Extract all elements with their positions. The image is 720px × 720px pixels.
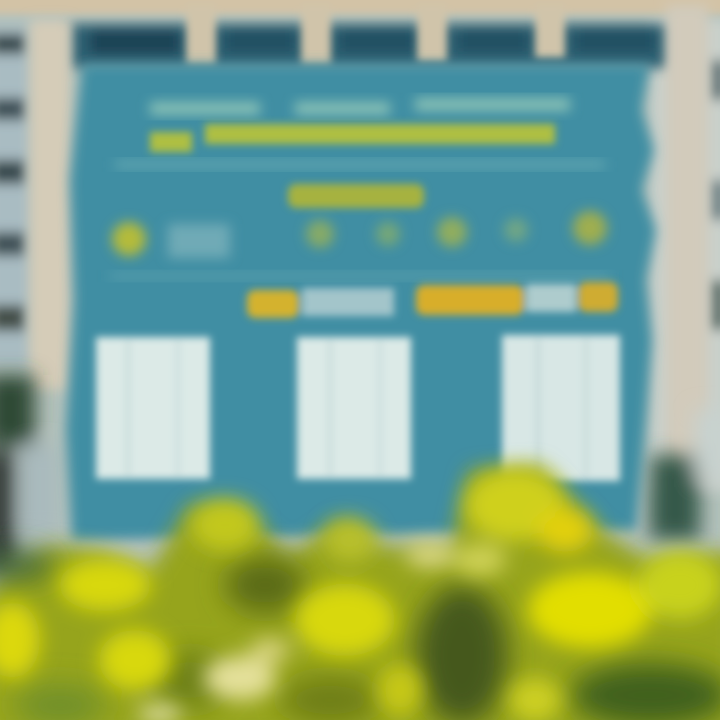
icon 5 [504, 218, 528, 242]
caption strip [110, 272, 610, 280]
lower left shrub and shadow [0, 375, 720, 570]
button row [247, 282, 618, 318]
icon 4 [437, 217, 467, 247]
card left [96, 337, 210, 479]
top beam and posts [0, 0, 720, 66]
button: pale [302, 288, 394, 316]
icon 1 [112, 222, 146, 256]
dark upper windows [70, 24, 670, 68]
right column [666, 5, 708, 475]
icon 6 [573, 211, 607, 245]
button: yellow middle [416, 285, 524, 315]
card middle [297, 337, 411, 479]
heading line 2 [150, 124, 555, 152]
left column [30, 20, 70, 390]
icon 3 [376, 222, 400, 246]
button: yellow right [578, 282, 618, 312]
foliage shadows [0, 551, 720, 720]
yellow section title [288, 184, 424, 208]
subheading strip [115, 160, 605, 169]
button: pale right [526, 284, 576, 312]
teal billboard panel [66, 64, 656, 540]
heading line 1 [150, 98, 570, 115]
row of icons [112, 211, 607, 258]
foliage [0, 465, 720, 720]
label block [168, 224, 230, 258]
foliage base [0, 465, 720, 720]
foliage highlights [0, 469, 720, 720]
button: yellow left [247, 290, 299, 318]
card right [502, 335, 620, 481]
icon 2 [306, 220, 334, 248]
heading area [115, 98, 605, 169]
